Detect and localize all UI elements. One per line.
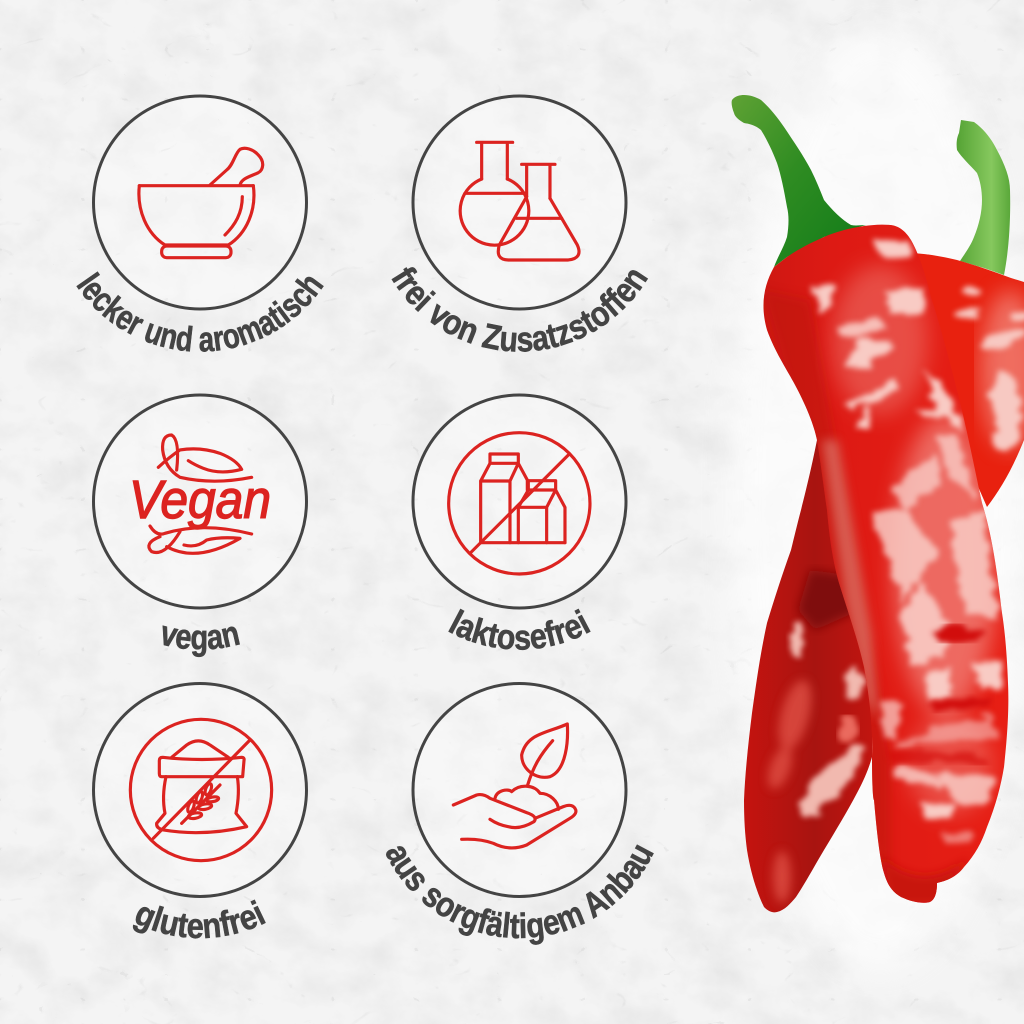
stem: front chili — [732, 95, 866, 267]
icon: mortar and pestle — [139, 148, 263, 258]
icon: crossed-out milk cartons — [449, 433, 590, 574]
label: vegan: vegan — [162, 625, 240, 658]
icon: vegan script logo — [129, 435, 271, 553]
chili peppers photo illustration — [732, 95, 1024, 920]
stem: back chili — [957, 120, 1010, 275]
pink wash under highlights — [832, 265, 997, 815]
chili: back right — [918, 253, 1024, 507]
icon: hand holding seedling — [453, 724, 576, 848]
icon: vegan script logo: Vegan — [129, 470, 271, 530]
icon circle: laktosefrei — [413, 395, 626, 608]
icon circle: lecker und aromatisch — [94, 96, 306, 309]
label: lecker und aromatisch: lecker und aromatisch — [76, 271, 324, 352]
label: frei von Zusatzstoffen: frei von Zusatzstoffen — [392, 267, 648, 352]
icon: laboratory flasks — [460, 142, 579, 260]
pale rim: left edge of main chili — [822, 440, 878, 720]
label: aus sorgfaeltigem Anbau: aus sorgfältigem Anbau — [386, 844, 654, 945]
icon circle: aus sorgfaeltigem Anbau — [413, 684, 626, 896]
icon circle: glutenfrei — [94, 684, 306, 896]
label: glutenfrei: glutenfrei — [132, 900, 266, 939]
icon: crossed-out flour sack — [130, 719, 272, 861]
icon circle: vegan — [94, 395, 306, 608]
chili: back left — [744, 440, 872, 912]
chili: front main — [763, 224, 1008, 903]
label: laktosefrei: laktosefrei — [448, 608, 591, 650]
icon circle: frei von Zusatzstoffen — [413, 96, 626, 309]
